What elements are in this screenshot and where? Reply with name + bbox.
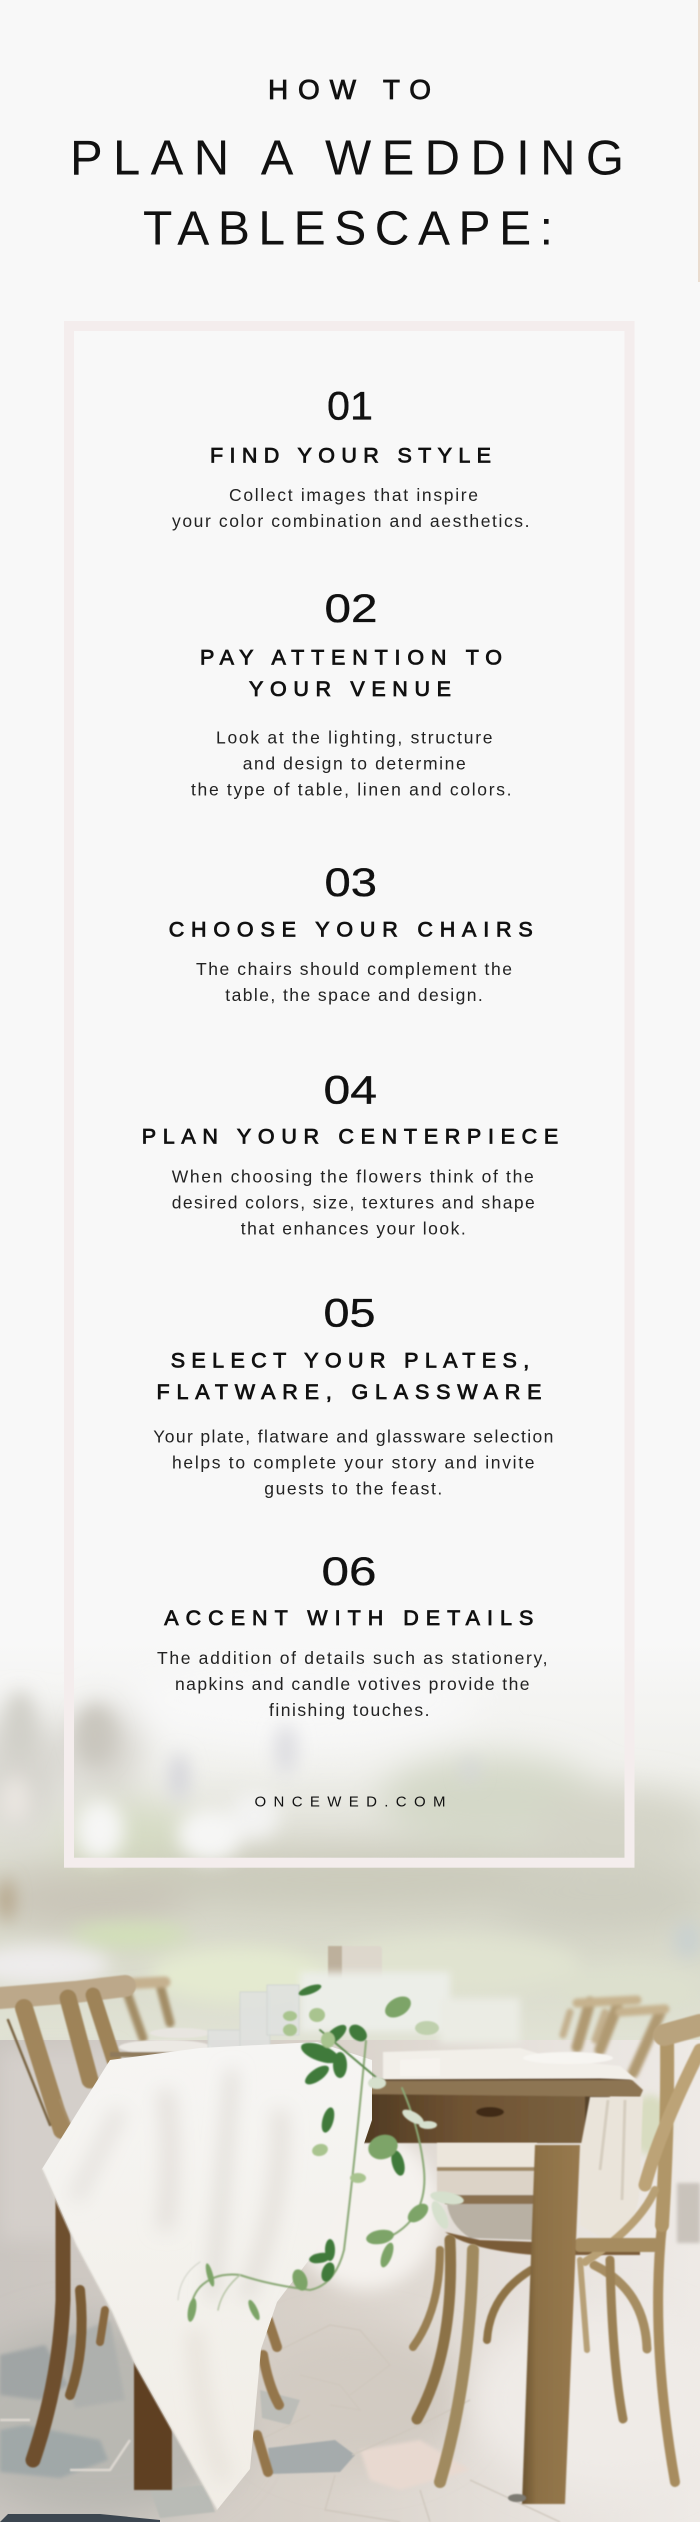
photo: right chair seat <box>437 2143 640 2255</box>
photo: table top and apron <box>360 2078 643 2143</box>
heading: find your style: FIND YOUR STYLE <box>210 444 491 468</box>
title line: how to: HOW TO <box>268 74 431 105</box>
photo: distant chairs right <box>563 2000 665 2073</box>
heading: plan your centerpiece: PLAN YOUR CENTERPIECE <box>142 1124 558 1148</box>
heading: select your plates, flatware, glassware <box>156 1348 542 1404</box>
step 01 <box>172 384 530 531</box>
step 02 <box>191 587 512 799</box>
body: step 01: Collect images that inspire <box>229 485 478 505</box>
number 06: 06 <box>322 1550 376 1594</box>
title <box>70 74 624 256</box>
photo: front left chair legs <box>33 2190 279 2472</box>
heading: select your plates, flatware, glassware: SELECT YOUR PLATES, <box>171 1348 529 1372</box>
body: step 02: and design to determine <box>243 753 466 773</box>
number 05: 05 <box>324 1292 376 1336</box>
body: step 02: the type of table, linen and colors. <box>191 779 512 799</box>
body: step 01 <box>172 485 530 531</box>
title line: tablescape: TABLESCAPE: <box>143 202 553 256</box>
body: step 02: Look at the lighting, structure <box>216 727 492 747</box>
photo: white linen tablecloth <box>42 2042 372 2510</box>
body: step 03 <box>196 959 512 1005</box>
body: step 02 <box>191 727 512 799</box>
body: step 04: desired colors, size, textures and shape <box>172 1192 535 1212</box>
photo: stone floor <box>0 2040 700 2522</box>
photo: front left chair back <box>0 1986 125 2145</box>
body: step 06 <box>157 1648 548 1720</box>
body: step 05: helps to complete your story and invite <box>172 1452 534 1472</box>
body: step 04: that enhances your look. <box>241 1218 466 1238</box>
body: step 06: napkins and candle votives provide the <box>175 1674 530 1694</box>
photo: left chairs <box>0 1982 279 2472</box>
body: step 04 <box>172 1166 535 1238</box>
heading: select your plates, flatware, glassware: FLATWARE, GLASSWARE <box>156 1380 542 1404</box>
edge strip <box>698 0 700 282</box>
step 04 <box>142 1068 558 1238</box>
heading: pay attention to your venue <box>200 646 502 701</box>
number 04: 04 <box>324 1068 377 1112</box>
photo backdrop: blurred trees and lawn <box>0 1640 700 2100</box>
photo: table setting <box>0 1640 700 2522</box>
body: step 05 <box>153 1426 553 1498</box>
heading: pay attention to your venue: PAY ATTENTION TO <box>200 646 502 670</box>
number 03: 03 <box>324 861 377 905</box>
step 03 <box>169 861 533 1005</box>
body: step 03: table, the space and design. <box>225 985 483 1005</box>
heading: accent with details: ACCENT WITH DETAILS <box>164 1606 533 1630</box>
title line: plan a wedding: PLAN A WEDDING <box>70 132 624 186</box>
photo: right table leg <box>508 2145 580 2504</box>
step 06 <box>157 1550 548 1720</box>
photo: right cloth <box>383 2048 643 2243</box>
body: step 04: When choosing the flowers think of the <box>172 1166 534 1186</box>
number 01: 01 <box>327 384 373 428</box>
body: step 05: guests to the feast. <box>264 1478 442 1498</box>
photo: left dark table leg <box>134 2360 172 2490</box>
photo: right chair legs and stretchers <box>413 2225 675 2482</box>
website: oncewed.com: ONCEWED.COM <box>254 1794 446 1811</box>
heading: pay attention to your venue: YOUR VENUE <box>249 677 451 701</box>
number 02: 02 <box>324 587 378 631</box>
body: step 06: The addition of details such as stationery, <box>157 1648 548 1668</box>
body: step 05: Your plate, flatware and glassware selection <box>153 1426 553 1446</box>
photo: green vine <box>178 1982 465 2323</box>
heading: choose your chairs: CHOOSE YOUR CHAIRS <box>169 917 533 941</box>
photo: right chair back <box>580 2025 700 2262</box>
body: step 06: finishing touches. <box>269 1700 430 1720</box>
photo: tableware <box>110 1946 520 2057</box>
step 05 <box>153 1292 553 1498</box>
body: step 01: your color combination and aesthetics. <box>172 511 530 531</box>
frame <box>69 326 630 1863</box>
body: step 03: The chairs should complement the <box>196 959 512 979</box>
